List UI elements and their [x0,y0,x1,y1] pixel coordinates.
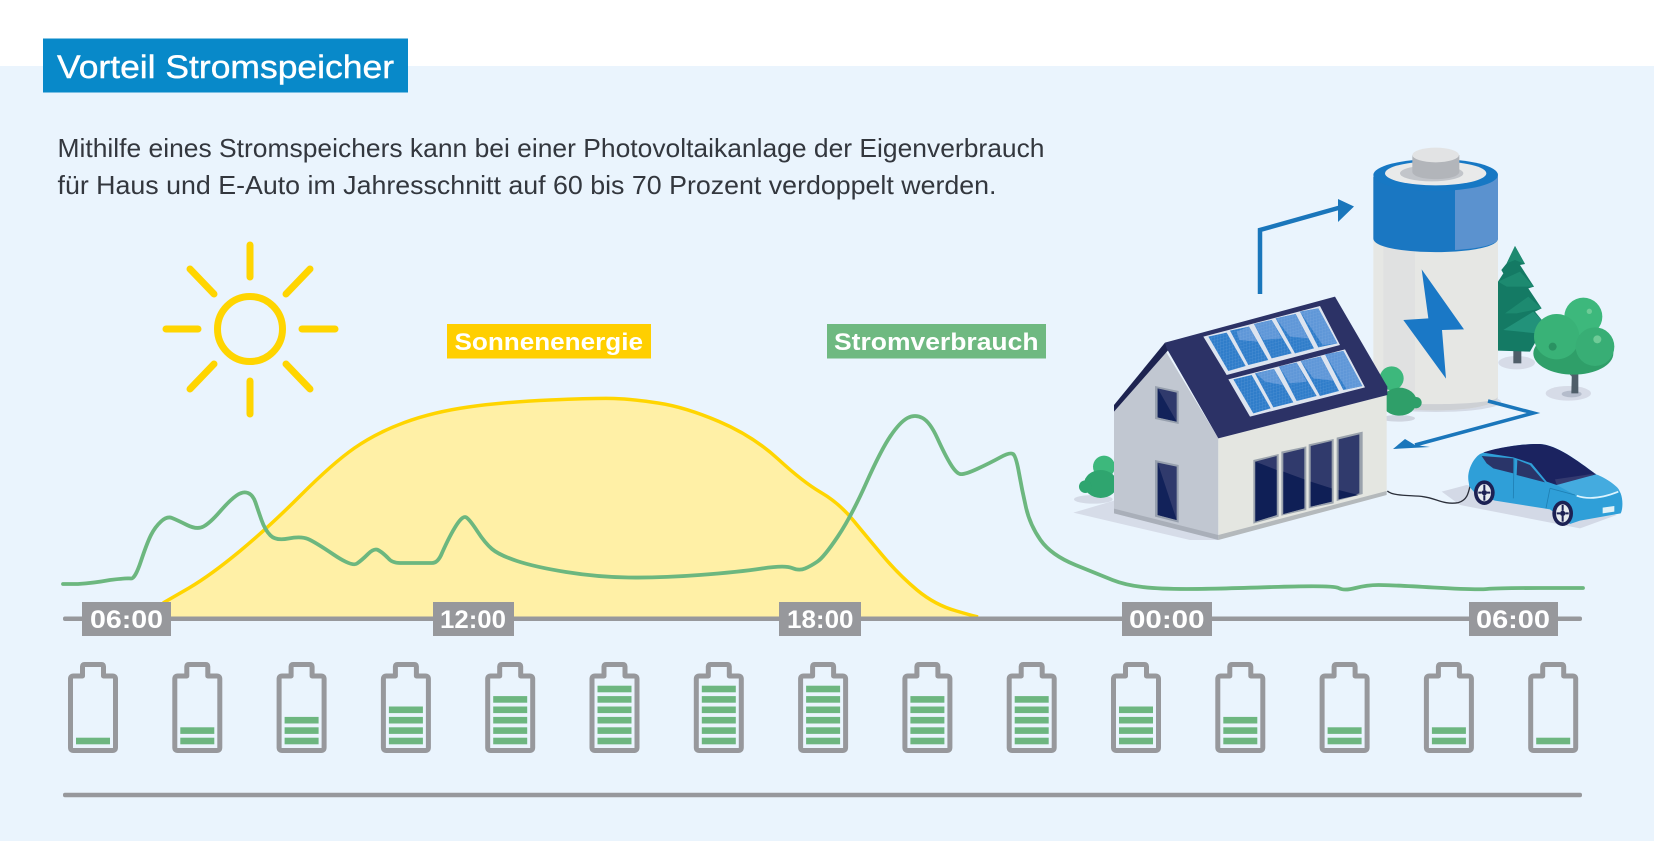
time label 00:00: 00:00 [1129,606,1204,634]
battery 3 [279,664,324,750]
storage battery [1373,148,1498,410]
roof and solar panels [1114,297,1387,438]
intro text: für Haus und E-Auto im Jahresschnitt auf 60 bis 70 Prozent verdoppelt werden. [58,170,996,200]
battery 4 [383,664,428,750]
battery level row [70,664,1576,750]
battery 13 [1322,664,1367,750]
label: Stromverbrauch: Stromverbrauch [834,329,1038,356]
battery 6 [592,664,637,750]
trees [1498,246,1614,401]
time label 06:00 [82,602,171,636]
chart: solar energy area [163,398,985,619]
title: Vorteil Stromspeicher [57,49,394,85]
time label 12:00 [433,602,514,636]
battery 10 [1009,664,1054,750]
battery 9 [905,664,950,750]
house walls [1073,350,1387,540]
time label 18:00: 18:00 [787,606,854,634]
battery 2 [175,664,220,750]
battery 1 [70,664,116,750]
time label 00:00 [1122,602,1212,636]
back bush [1380,366,1422,422]
time label 12:00: 12:00 [440,606,506,634]
time label 06:00 next day: 06:00 [1476,606,1550,634]
label: Sonnenenergie: Sonnenenergie [454,329,643,356]
house [1073,297,1387,540]
icon: sun [166,245,335,414]
battery 11 [1114,664,1158,750]
battery 8 [801,664,846,750]
battery 12 [1218,664,1263,750]
battery 7 [696,664,741,750]
battery 5 [488,664,533,750]
time label 06:00 next day [1469,602,1558,636]
battery 15 [1531,664,1576,750]
time axis [63,602,1582,636]
time label 06:00: 06:00 [90,606,163,634]
time label 18:00 [779,602,861,636]
intro text: Mithilfe eines Stromspeichers kann bei einer Photovoltaikanlage der Eigenverbrauch [58,133,1044,163]
ground shadow under battery [1371,392,1501,412]
battery 14 [1426,664,1471,750]
illustration: trees, battery, house, car [1073,148,1622,540]
title [43,38,408,92]
arrow from battery to house [1393,401,1534,449]
intro text [58,133,1044,200]
arrow to battery [1260,199,1354,294]
electric car and charging cable [1387,444,1622,528]
patio windows [1253,432,1363,524]
gable windows [1155,386,1179,523]
chart: power consumption line [63,416,1583,590]
label: Sonnenenergie [447,324,651,358]
label: Stromverbrauch [827,324,1046,358]
